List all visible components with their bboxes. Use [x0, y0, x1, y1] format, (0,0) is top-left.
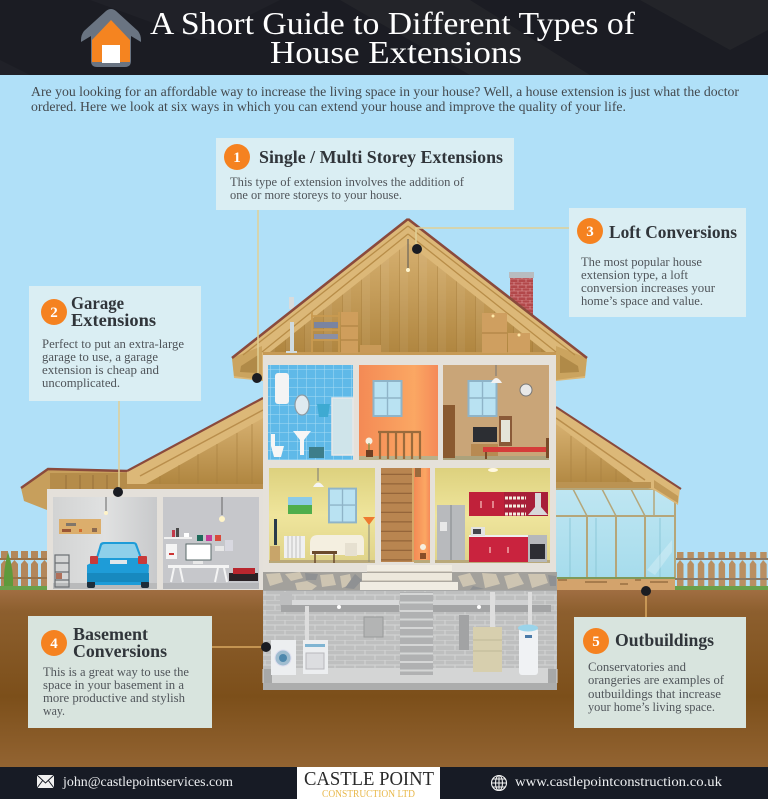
garage shelf — [59, 519, 101, 534]
bedroom — [443, 365, 549, 460]
basement — [263, 590, 557, 690]
icon: house — [81, 9, 141, 67]
panel: loft conversions: extension type, a loft — [581, 268, 689, 282]
landing room — [359, 365, 438, 460]
panel: loft conversions: 3 — [586, 224, 594, 240]
connector dots — [113, 244, 651, 652]
panel: outbuildings — [574, 617, 746, 728]
front steps — [360, 565, 458, 590]
washing machine — [271, 640, 328, 675]
water heater — [518, 624, 538, 675]
title: House Extensions — [270, 34, 522, 70]
panel: garage extensions: 2 — [50, 305, 58, 321]
home office desk — [164, 528, 258, 582]
main house attic roof — [232, 219, 587, 381]
chimney — [509, 272, 534, 316]
icon: email — [37, 775, 54, 788]
attic shelves and boxes — [286, 312, 530, 353]
title — [150, 5, 635, 70]
panel: outbuildings: your home’s living space. — [588, 700, 715, 714]
panel: loft conversions: home’s space and value. — [581, 294, 703, 308]
panel: basement conversions — [28, 616, 212, 728]
conservatory roof gable — [556, 407, 681, 505]
panel: garage extensions: Perfect to put an extra-large — [42, 337, 184, 351]
sky background — [0, 75, 768, 591]
email address: john@castlepointservices.com — [62, 775, 233, 790]
panel: outbuildings: outbuildings that increase — [588, 687, 721, 701]
logo: CASTLE POINT — [304, 768, 434, 790]
panel: loft conversions — [569, 208, 746, 317]
panel: outbuildings: Outbuildings — [615, 630, 714, 650]
panel: garage extensions: Extensions — [71, 310, 156, 330]
panel: single / multi storey extensions: This type of extension involves the addition of — [230, 175, 465, 189]
panel: basement conversions: This is a great way to use the — [43, 665, 189, 679]
kitchen — [435, 468, 550, 563]
conservatory — [556, 488, 675, 590]
staircase — [381, 468, 430, 563]
panel: garage extensions: extension is cheap and — [42, 363, 160, 377]
garage lights — [104, 497, 225, 522]
left fence — [0, 551, 47, 590]
panel: basement conversions: Basement — [73, 624, 148, 644]
website address: www.castlepointconstruction.co.uk — [515, 775, 722, 790]
connector lines — [119, 210, 646, 647]
stone foundation — [263, 572, 557, 590]
panel: garage extensions: uncomplicated. — [42, 376, 120, 390]
panel: garage extensions: garage to use, a garage — [42, 350, 158, 364]
panel: single / multi storey extensions: one or more storeys to your house. — [230, 188, 402, 202]
roof vent — [289, 297, 294, 309]
electrical panel — [364, 617, 383, 637]
panel: garage extensions — [29, 286, 201, 401]
panel: single / multi storey extensions: 1 — [233, 150, 241, 166]
house walls — [263, 355, 556, 572]
title: A Short Guide to Different Types of — [150, 5, 635, 41]
icon: globe — [492, 776, 506, 790]
attic light — [406, 239, 410, 272]
panel: basement conversions: 4 — [50, 636, 58, 652]
panel: outbuildings: orangeries are examples of — [588, 673, 725, 687]
panel: basement conversions: Conversions — [73, 641, 167, 661]
logo — [297, 767, 440, 799]
panel: single / multi storey extensions: Single / Multi Storey Extensions — [259, 147, 503, 167]
footer — [0, 767, 768, 799]
intro text: Are you looking for an affordable way to increase the living space in your house? Well, a house extension is just what the doctor — [31, 84, 740, 99]
panel: basement conversions: more productive and stylish — [43, 691, 186, 705]
intro text — [31, 84, 740, 114]
garage — [21, 398, 263, 590]
ducts — [280, 592, 551, 642]
right fence — [674, 552, 768, 590]
furnace — [473, 627, 502, 672]
intro text: ordered. Here we look at six ways in which you can extend your house and improve the quality of your life. — [31, 99, 626, 114]
header band — [0, 0, 768, 75]
panel: loft conversions: The most popular house — [581, 255, 702, 269]
icon: blue car — [87, 542, 149, 588]
panel: loft conversions: Loft Conversions — [609, 222, 737, 242]
panel: garage extensions: Garage — [71, 293, 124, 313]
panel: loft conversions: conversion increases your — [581, 281, 716, 295]
panel: single / multi storey extensions — [216, 138, 514, 210]
panel: outbuildings: 5 — [592, 634, 600, 650]
tool rack — [55, 555, 69, 587]
panel: basement conversions: space in your basement in a — [43, 678, 184, 692]
panel: basement conversions: way. — [43, 704, 65, 718]
bathroom — [268, 365, 353, 460]
living room — [269, 468, 375, 563]
basement stairs — [400, 592, 433, 675]
ground — [0, 590, 768, 768]
panel: outbuildings: Conservatories and — [588, 660, 687, 674]
